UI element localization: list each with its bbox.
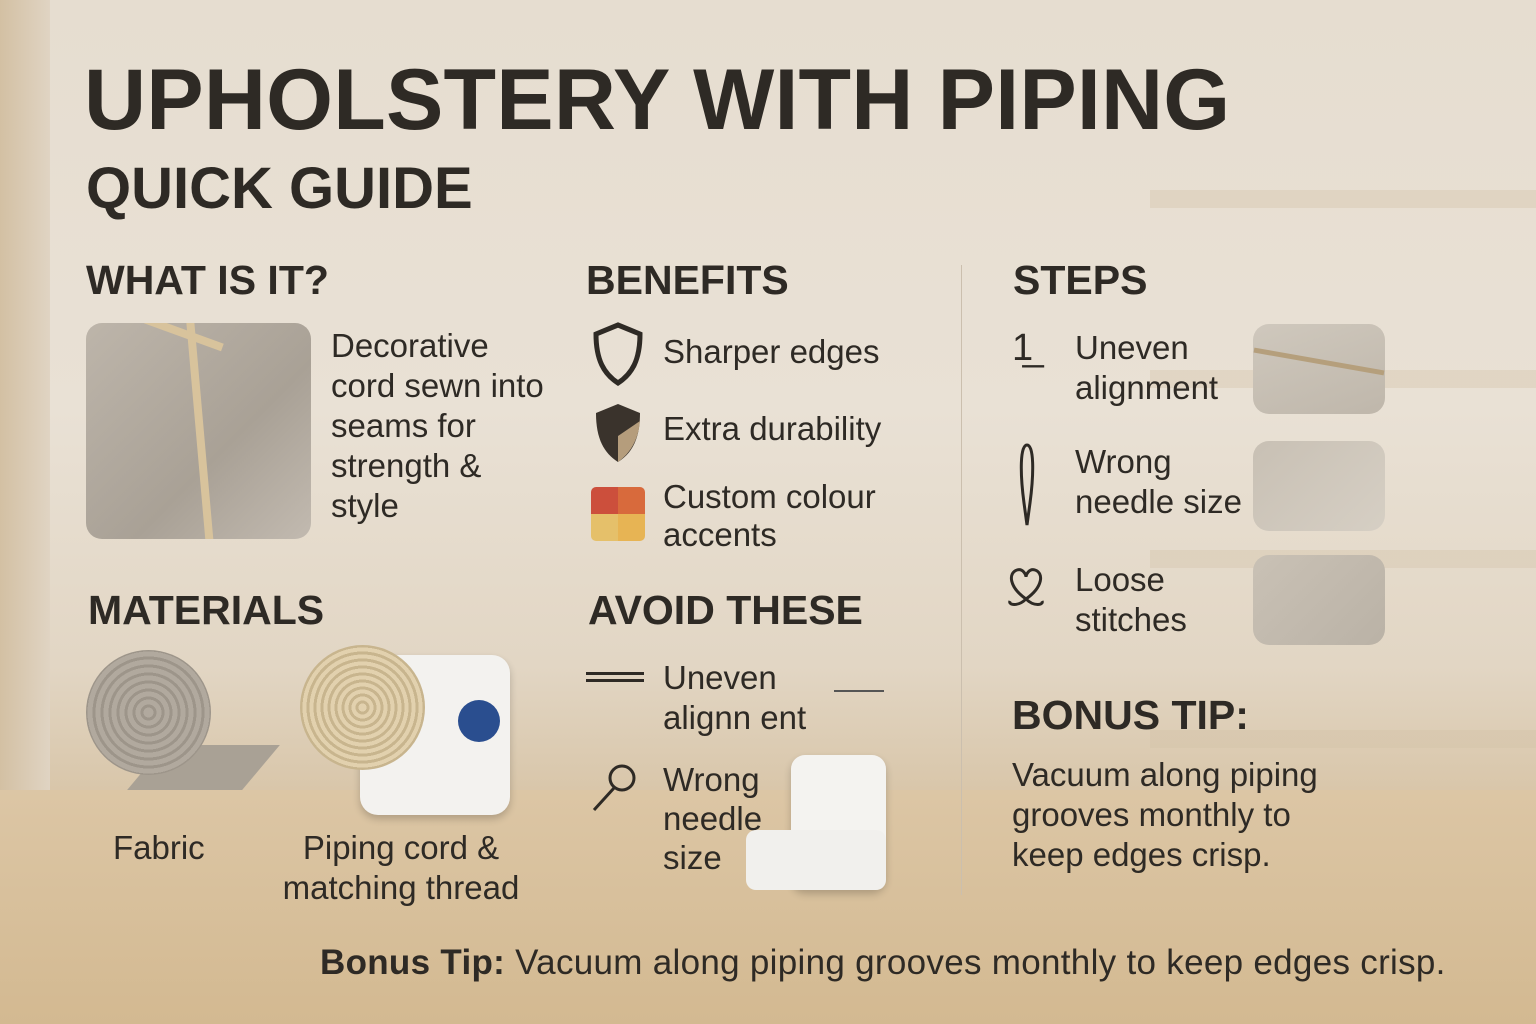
label: piping cord & thread	[283, 829, 519, 906]
label: fabric: Fabric	[113, 829, 205, 866]
step 2 text: needle size	[1075, 483, 1242, 520]
divider	[961, 265, 962, 895]
step 2 text	[1075, 443, 1242, 520]
heading: steps: STEPS	[1013, 257, 1147, 303]
step 1 text: Uneven	[1075, 329, 1189, 366]
background shelves	[1150, 150, 1536, 780]
label: piping cord & thread: matching thread	[283, 869, 519, 906]
photo step 2	[1253, 441, 1385, 531]
photo: piping seam	[86, 323, 311, 539]
bonus tip text: Vacuum along piping grooves monthly to keep edges crisp.	[1012, 756, 1318, 873]
benefit 2: Extra durability	[663, 410, 881, 447]
image: fabric roll	[86, 650, 280, 790]
avoid 1 text	[663, 659, 806, 736]
footer tip: Bonus Tip: Vacuum along piping grooves monthly to keep edges crisp.	[320, 943, 1446, 982]
image: sewing machine	[746, 755, 890, 898]
heading: what is it: WHAT IS IT?	[86, 257, 329, 303]
label: piping cord & thread: Piping cord &	[303, 829, 499, 866]
step 2 text: Wrong	[1075, 443, 1172, 480]
image: piping cord & machine	[300, 645, 514, 822]
avoid 2 text	[663, 761, 762, 876]
title: UPHOLSTERY WITH PIPING	[84, 52, 1230, 148]
panel: what is it	[86, 257, 544, 539]
avoid 2 text: needle	[663, 800, 762, 837]
avoid 1 text: Uneven	[663, 659, 777, 696]
heading: materials: MATERIALS	[88, 587, 324, 633]
icon: shield filled	[596, 404, 640, 462]
icon: heart loop	[1008, 568, 1044, 606]
icon: step 1: 1̲	[1012, 327, 1033, 369]
icon: needle	[1020, 444, 1034, 526]
heading: bonus tip: BONUS TIP:	[1012, 692, 1249, 738]
benefit 3: Custom colour	[663, 478, 876, 515]
icon: colour swatches	[591, 487, 645, 541]
avoid 1 text: alignn ent	[663, 699, 806, 736]
description text: Decorative cord sewn into seams for strength & style	[331, 327, 544, 524]
step 1 text	[1075, 329, 1218, 406]
avoid 2 text: Wrong	[663, 761, 760, 798]
step 1 text: alignment	[1075, 369, 1218, 406]
step 3 text: stitches	[1075, 601, 1187, 638]
panel: benefits	[586, 257, 882, 553]
panel: bonus tip	[1012, 692, 1318, 873]
background wall edge	[0, 0, 50, 800]
panel: steps	[1008, 257, 1385, 645]
photo step 3	[1253, 555, 1385, 645]
icon: pin	[834, 662, 884, 692]
step 3 text: Loose	[1075, 561, 1165, 598]
panel: materials	[86, 587, 519, 906]
icon: shield outline	[594, 322, 642, 386]
icon: needle threader	[593, 764, 636, 811]
step 3 text	[1075, 561, 1187, 638]
benefit 3	[663, 478, 876, 553]
heading: benefits: BENEFITS	[586, 257, 789, 303]
panel: avoid these	[586, 587, 890, 898]
benefit 3: accents	[663, 516, 777, 553]
subtitle: QUICK GUIDE	[86, 156, 473, 221]
icon: parallel lines	[586, 672, 644, 682]
background table	[0, 790, 1536, 1024]
benefit 1: Sharper edges	[663, 333, 879, 370]
heading: avoid these: AVOID THESE	[588, 587, 863, 633]
avoid 2 text: size	[663, 839, 722, 876]
photo step 1	[1253, 324, 1385, 414]
